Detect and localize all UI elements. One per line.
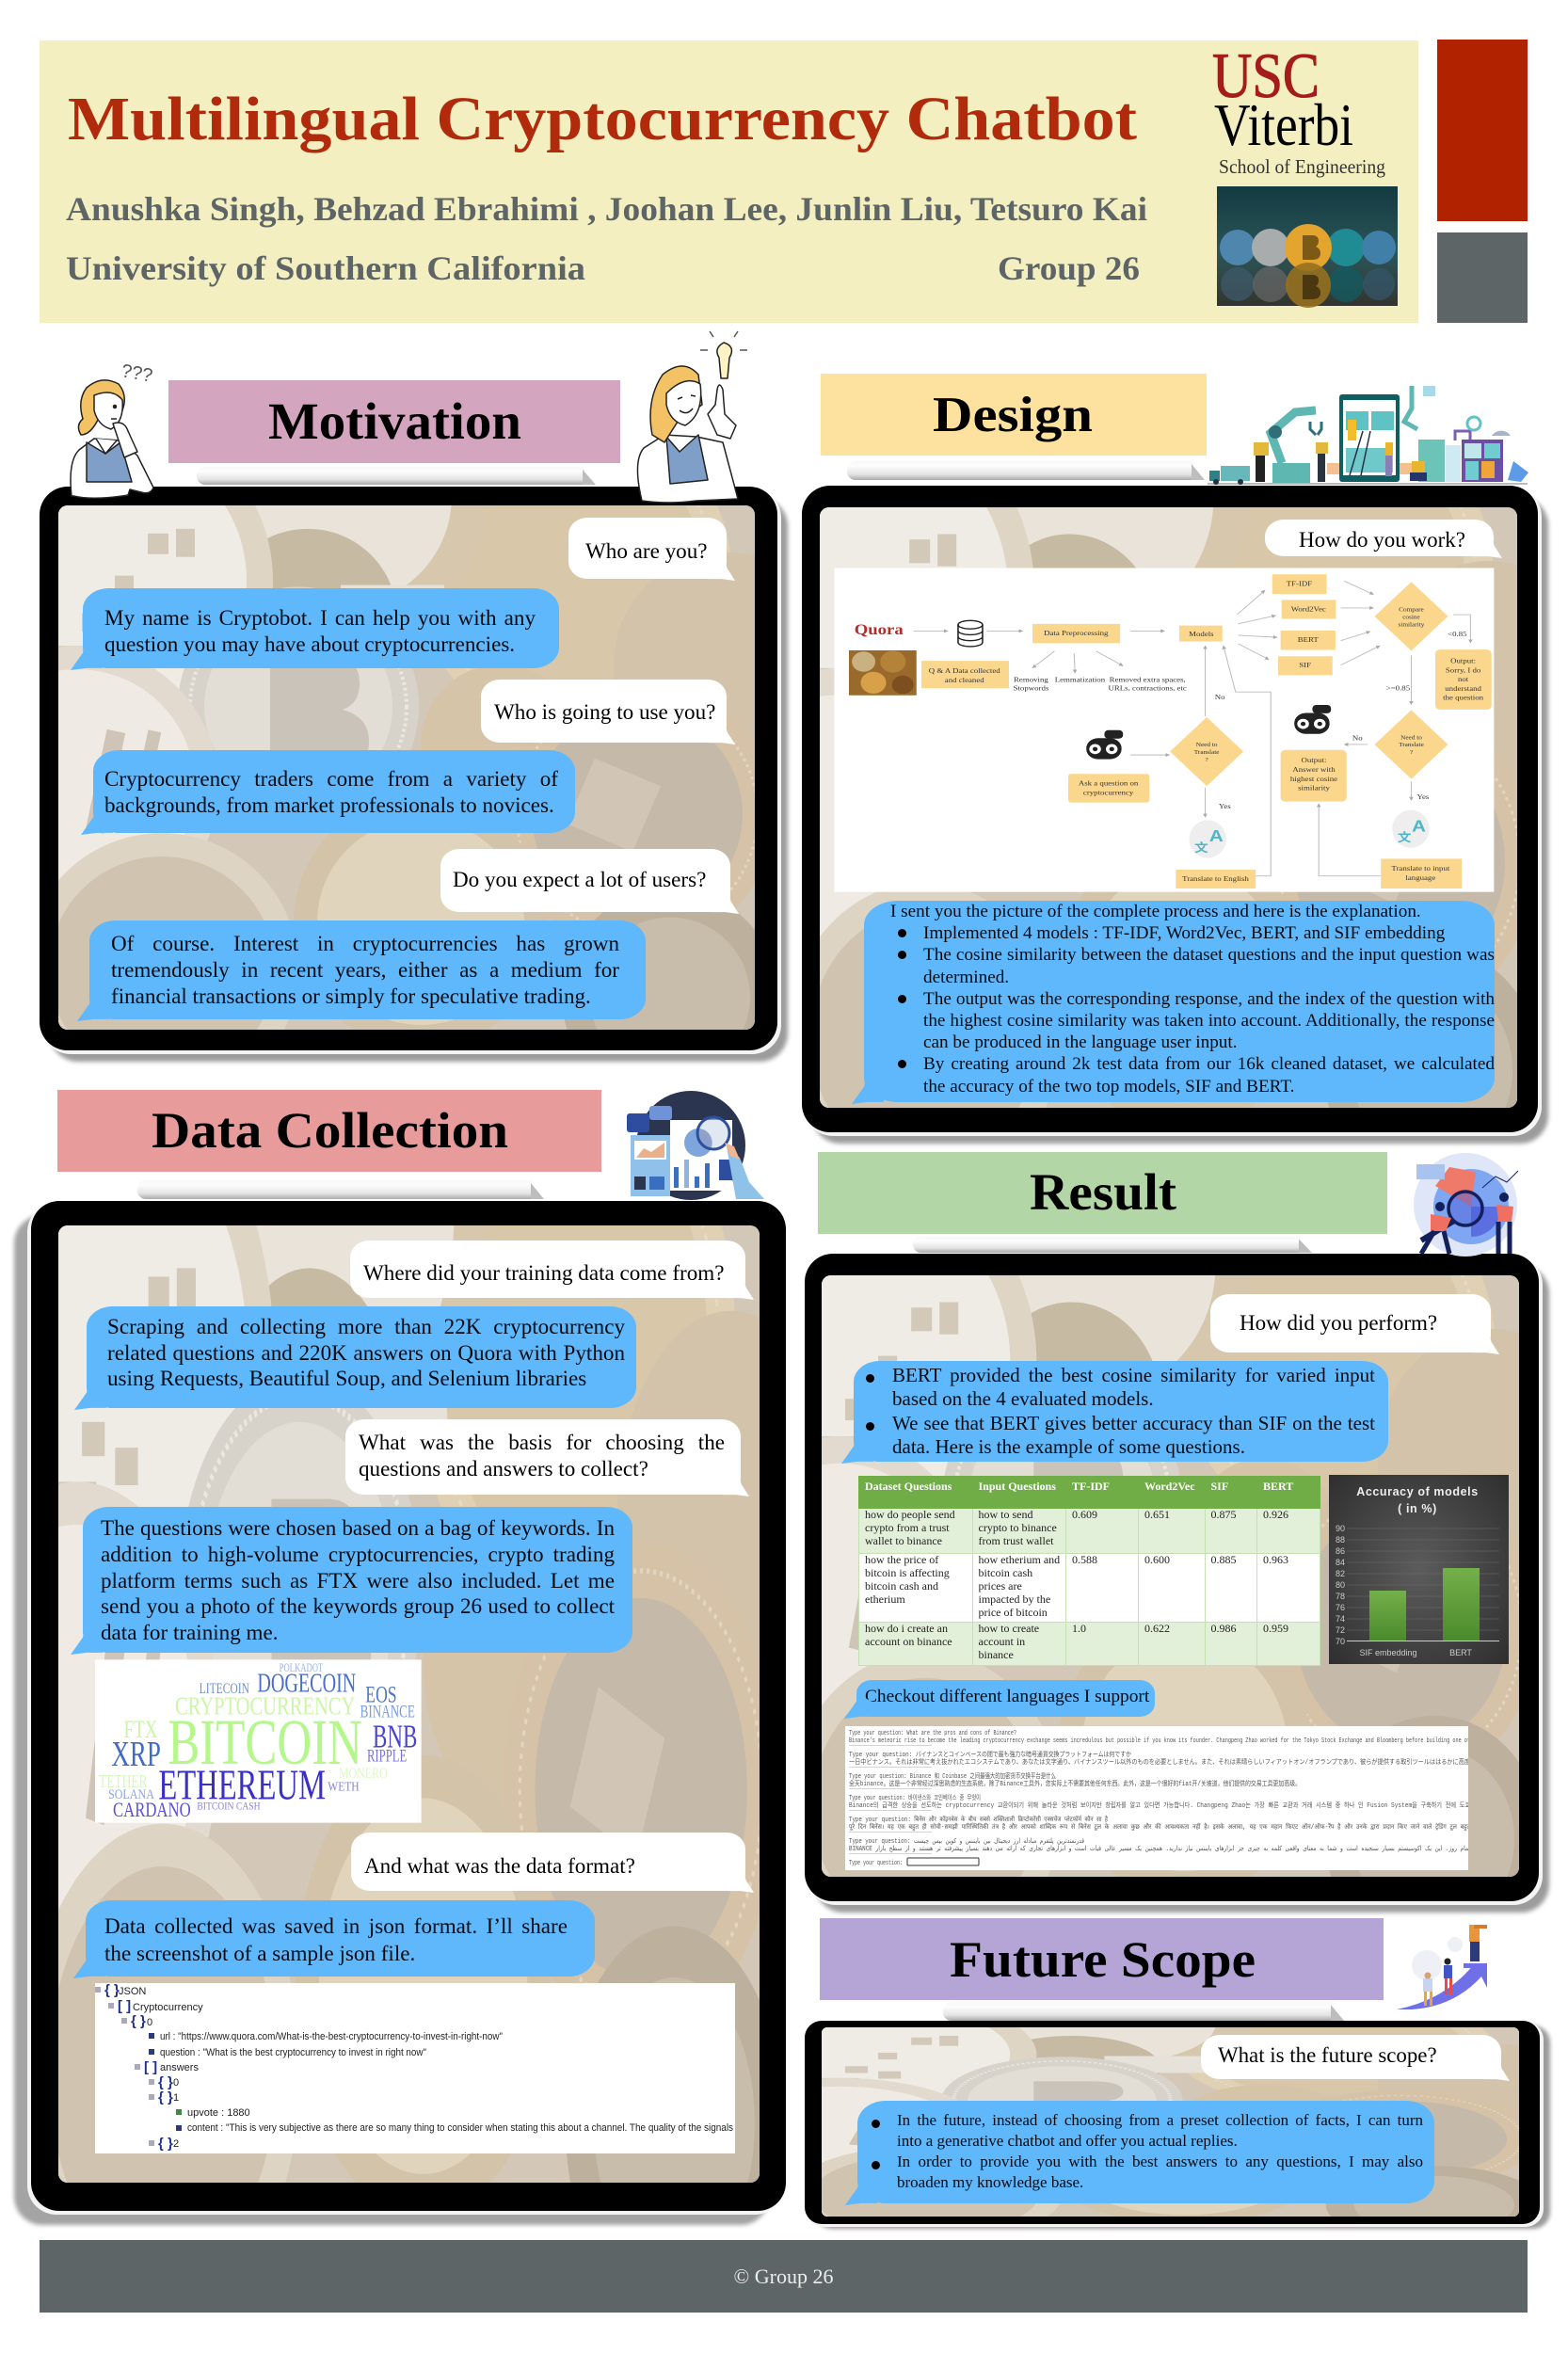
- user bubble: Who are you?: [585, 538, 708, 563]
- comparison table: how to send: [979, 1508, 1033, 1521]
- json screenshot: content : "This is very subjective as there are so many thing to consider when stating this about a channel. The quality of the signals is: [187, 2122, 743, 2134]
- bar chart: accuracy of models: 90: [1336, 1524, 1345, 1533]
- bar chart: accuracy of models: 88: [1336, 1535, 1345, 1545]
- flow labels: Removing: [1014, 676, 1048, 683]
- panel: design: [802, 374, 1551, 1146]
- json screenshot: answers: [160, 2062, 199, 2073]
- flow labels: Compare: [1399, 607, 1424, 613]
- multilingual terminal screenshot: पूरे दिन बिनेंस। यह एक बहुत ही सोची-समझी पारिस्थितिकी तंत्र है और आपको शाब्दिक रूप से बिनेंस टूल के अलावा कुछ और की आवश्यकता नहीं है। इसके अलावा, यह एक महान फिएट ऑन/ऑफ-रैंप है और उनके द्वारा प्रदान किए जाने वाले ट्रेडिंग टूल बहुत: [849, 1822, 1471, 1832]
- comparison table: 0.600: [1144, 1553, 1170, 1566]
- tablet frame: [805, 2021, 1540, 2224]
- bot bubble: [87, 1306, 636, 1408]
- flow labels: not: [1458, 676, 1469, 683]
- bot bubble: using Requests, Beautiful Soup, and Selenium libraries: [107, 1366, 586, 1390]
- comparison table: bitcoin is affecting: [865, 1566, 950, 1579]
- comparison table: impacted by the: [979, 1593, 1050, 1606]
- bot bubble: [83, 1507, 632, 1653]
- university: University of Southern California: [66, 249, 585, 287]
- multilingual terminal screenshot: Type your question:: [849, 1860, 903, 1867]
- comparison table: crypto to binance: [979, 1521, 1057, 1534]
- word cloud: RIPPLE: [367, 1747, 407, 1767]
- word cloud: SOLANA: [108, 1787, 154, 1802]
- bot bubble: [854, 1361, 1388, 1462]
- user bubble: [440, 849, 730, 912]
- bar chart: accuracy of models: 74: [1336, 1614, 1345, 1624]
- flow labels: ?: [1410, 750, 1413, 756]
- flow labels: URLs, contractions, etc: [1109, 684, 1187, 692]
- word cloud: DOGECOIN: [257, 1668, 357, 1698]
- flow labels: Translate to input: [1391, 864, 1450, 872]
- tablet frame: [31, 1201, 786, 2211]
- coin background screen: [822, 1275, 1519, 1877]
- icon: growth arrow: [1397, 1925, 1487, 2009]
- heading: result: Result: [1030, 1163, 1177, 1221]
- user bubble: [345, 1419, 741, 1495]
- comparison table: etherium: [865, 1593, 905, 1606]
- flow labels: BERT: [1298, 636, 1319, 644]
- word cloud: BITCOIN CASH: [197, 1799, 261, 1812]
- user bubble: How did you perform?: [1240, 1311, 1437, 1335]
- flow labels: SIF: [1299, 661, 1311, 669]
- flow labels: Need to: [1400, 735, 1423, 741]
- multilingual terminal screenshot: 一日中ビナンス。それは非常に考え抜かれたエコシステムであり、あなたは文字通り、バイナンスツール以外のものを必要としません。また、それは素晴らしいフィアットオン/オフランプであり、彼らが提供する取引ツールははるかに高度: [849, 1757, 1470, 1767]
- user bubble: [568, 518, 727, 579]
- json screenshot: [ ]: [144, 2059, 157, 2075]
- comparison table: how etherium and: [979, 1553, 1060, 1566]
- flow labels: Q & A Data collected: [929, 667, 1001, 675]
- bot bubble: In the future, instead of choosing from a preset collection of facts, I can turn: [897, 2111, 1423, 2129]
- bot bubble: financial transactions or simply for speculative trading.: [111, 984, 591, 1008]
- flow labels: [855, 580, 1483, 883]
- bot bubble: The questions were chosen based on a bag of keywords. In: [101, 1515, 615, 1540]
- flow labels: similarity: [1298, 784, 1331, 792]
- word cloud: MONERO: [339, 1766, 388, 1782]
- bot bubble: [86, 1900, 595, 1977]
- bar chart: accuracy of models: Accuracy of models: [1356, 1485, 1479, 1498]
- heading: motivation: Motivation: [268, 392, 521, 450]
- word cloud: BINANCE: [360, 1702, 415, 1721]
- flow labels: highest cosine: [1290, 775, 1337, 783]
- heading: motivation: [168, 380, 620, 463]
- flow labels: >=0.85: [1386, 684, 1410, 692]
- logo: USC Viterbi: Viterbi: [1214, 92, 1353, 158]
- comparison table: how the price of: [865, 1553, 938, 1566]
- bar chart: accuracy of models: 76: [1336, 1603, 1345, 1612]
- heading: data collection: [57, 1090, 601, 1172]
- flow connectors: [914, 581, 1470, 876]
- word cloud: BNB: [373, 1719, 417, 1755]
- bot bubble: can be produced in the language user input.: [923, 1032, 1238, 1052]
- flow labels: TF-IDF: [1287, 580, 1313, 588]
- translate icons: [1189, 810, 1430, 857]
- json screenshot: 1: [173, 2092, 179, 2104]
- flow labels: Translate to English: [1182, 875, 1249, 883]
- word cloud: ETHEREUM: [158, 1761, 326, 1808]
- bot bubble: related questions and 220K answers on Quora with Python: [107, 1340, 625, 1365]
- comparison table: prices are: [979, 1579, 1022, 1593]
- word cloud: XRP: [111, 1735, 161, 1774]
- bot bubble: [89, 920, 646, 1019]
- panel: motivation: [40, 331, 791, 1064]
- user bubble: [1201, 2035, 1501, 2079]
- stylus: [913, 1237, 1301, 1253]
- title banner: [40, 40, 1418, 323]
- comparison table: SIF: [1210, 1480, 1228, 1493]
- json screenshot: 2: [173, 2138, 179, 2150]
- json screenshot: JSON: [119, 1986, 146, 1997]
- bot bubble: data for training me.: [101, 1620, 279, 1644]
- bot bubble: [856, 1680, 1155, 1717]
- multilingual terminal screenshot: [845, 1726, 1471, 1870]
- multilingual terminal screenshot: Type your question: Binance 和 Coinbase 之间最强大的加密货币交换平台是什么: [849, 1771, 1056, 1781]
- user bubble: And what was the data format?: [364, 1853, 635, 1878]
- flow labels: ?: [1206, 757, 1208, 763]
- bot bubble: Scraping and collecting more than 22K cryptocurrency: [107, 1314, 625, 1338]
- comparison table: price of bitcoin: [979, 1606, 1048, 1619]
- comparison table: how do i create an: [865, 1622, 948, 1635]
- translate icons: 文: [1194, 838, 1208, 855]
- comparison table: 0.588: [1072, 1553, 1097, 1566]
- flow labels: cosine: [1402, 615, 1420, 620]
- json screenshot: [ ]: [118, 1998, 131, 2014]
- bot bubble: [864, 901, 1495, 1102]
- bot bubble: backgrounds, from market professionals to novices.: [104, 792, 554, 817]
- multilingual terminal screenshot: 全天binance。这是一个非常经过深思熟虑的生态系统，除了Binance工具外，您实际上不需要其他任何东西。此外，这是一个很好的fiat开/关坡道，他们提供的交易工具更加高级。: [849, 1779, 1301, 1788]
- bot bubble: addition to high-volume cryptocurrencies, crypto trading: [101, 1542, 615, 1566]
- word cloud: TETHER: [99, 1771, 148, 1792]
- multilingual terminal screenshot: BINANCE تمام روز. این یک اکوسیستم بسیار سنجیده است و شما به معنای واقعی کلمه به چیزی جز ابزارهای بایننس نیاز ندارید. همچنین یک مسیر عالی فیات است و ابزارهای تجاری که ارائه می دهند بسیار پیشرفته تر هستند و از سطح بازار: [849, 1845, 1470, 1853]
- comparison table: crypto from a trust: [865, 1521, 950, 1534]
- bot bubble: [857, 2101, 1434, 2203]
- comparison table: 0.622: [1144, 1622, 1170, 1635]
- word cloud: POLKADOT: [280, 1661, 323, 1674]
- flow labels: similarity: [1399, 622, 1425, 628]
- word cloud: EOS: [365, 1681, 397, 1707]
- comparison table: 0.885: [1210, 1553, 1237, 1566]
- bot bubble: Cryptocurrency traders come from a variety of: [104, 766, 558, 791]
- flow labels: Word2Vec: [1291, 605, 1326, 613]
- comparison table: BERT: [1263, 1480, 1293, 1493]
- flow labels: and cleaned: [945, 676, 985, 684]
- bot bubble: My name is Cryptobot. I can help you with any: [104, 605, 536, 630]
- bar chart: accuracy of models: [1329, 1475, 1509, 1664]
- word cloud: [95, 1659, 422, 1823]
- json screenshot: { }: [158, 2074, 173, 2090]
- flow labels: Yes: [1417, 793, 1429, 801]
- user bubble: [350, 1241, 745, 1298]
- flow labels: Output:: [1450, 657, 1476, 664]
- coin background screen: [58, 1225, 760, 2183]
- stylus: [943, 2002, 1333, 2021]
- tablet frame: [805, 1254, 1539, 1901]
- flow labels: Models: [1189, 631, 1214, 638]
- image: crypto coins: [1217, 186, 1398, 308]
- flowchart: [834, 568, 1494, 892]
- json screenshot: url : "https://www.quora.com/What-is-the-best-cryptocurrency-to-invest-in-right-now": [160, 2031, 503, 2042]
- bot bubble: the highest cosine similarity was taken into account. Additionally, the response: [923, 1011, 1495, 1031]
- word cloud: CRYPTOCURRENCY: [175, 1691, 355, 1721]
- json screenshot: { }: [131, 2013, 146, 2029]
- bar chart: accuracy of models: SIF embedding: [1359, 1648, 1417, 1657]
- flow labels: Translate: [1194, 750, 1219, 756]
- coin background screen: [822, 2027, 1519, 2217]
- multilingual terminal screenshot: Binance의 급격한 상승을 선도하는 cryptocurrency 교환이되기 위해 놀라운 것처럼 보이지만 창립자를 알고 있다면 가능합니다. Changpeng Zhao는 가장 빠른 교환과 거래 시스템 중 하나 인 Fusion System을 구축하기 전에 도쿄: [849, 1801, 1470, 1810]
- bot bubble: platform terms such as FTX were also included. Let me: [101, 1568, 615, 1593]
- comparison table: bitcoin cash and: [865, 1579, 938, 1593]
- bar chart: accuracy of models: 86: [1336, 1546, 1345, 1556]
- json screenshot: 0: [173, 2077, 179, 2089]
- bot bubble: [83, 588, 559, 668]
- icon: result analysis: [1414, 1153, 1518, 1257]
- comparison table: [858, 1476, 1320, 1666]
- icon: data analysis: [627, 1091, 764, 1200]
- bar chart: accuracy of models: 72: [1336, 1625, 1345, 1635]
- bot bubble: We see that BERT gives better accuracy than SIF on the test: [892, 1412, 1375, 1434]
- user bubble: How do you work?: [1299, 528, 1465, 552]
- comparison table: Input Questions: [979, 1480, 1056, 1493]
- logo: USC Viterbi: School of Engineering: [1219, 155, 1385, 178]
- comparison table: how do people send: [865, 1508, 955, 1521]
- flow labels: No: [1352, 734, 1363, 742]
- bar chart: accuracy of models: 78: [1336, 1592, 1345, 1601]
- coin background screen: [58, 505, 755, 1030]
- comparison table: Dataset Questions: [865, 1480, 952, 1493]
- comparison table: 0.926: [1263, 1508, 1288, 1521]
- multilingual terminal screenshot: Type your question: 바이낸스와 코인베이스 중 무엇이: [849, 1793, 981, 1802]
- json screenshot: [95, 1982, 743, 2153]
- bot bubble: data. Here is the example of some questions.: [892, 1435, 1245, 1458]
- multilingual terminal screenshot: Type your question: قدرتمندترین پلتفرم مبادله ارز دیجیتال بین بایننس و کوین بیس چیست: [849, 1837, 1084, 1846]
- user bubble: Do you expect a lot of users?: [453, 867, 706, 891]
- title: Multilingual Cryptocurrency Chatbot: [68, 85, 1137, 153]
- json screenshot: { }: [104, 1982, 120, 1998]
- comparison table: 0.986: [1210, 1622, 1237, 1635]
- bot bubble: question you may have about cryptocurrencies.: [104, 632, 515, 656]
- translate icons: A: [1209, 826, 1224, 846]
- group label: Group 26: [998, 249, 1140, 287]
- comparison table: TF-IDF: [1072, 1480, 1110, 1493]
- bot bubble: Checkout different languages I support: [865, 1687, 1149, 1706]
- heading: result: [818, 1152, 1387, 1234]
- coin photo: [849, 650, 917, 696]
- comparison table: account on binance: [865, 1635, 952, 1648]
- footer: © Group 26: [734, 2265, 833, 2288]
- heading: future scope: Future Scope: [950, 1931, 1256, 1988]
- json screenshot: 0: [147, 2017, 152, 2028]
- json screenshot: Cryptocurrency: [133, 2002, 203, 2013]
- json screenshot: upvote : 1880: [187, 2107, 250, 2119]
- word cloud: BITCOIN: [168, 1706, 362, 1778]
- flow labels: Quora: [855, 620, 904, 638]
- comparison table: how to create: [979, 1622, 1039, 1635]
- bot bubble: By creating around 2k test data from our 16k cleaned dataset, we calculated: [923, 1054, 1495, 1074]
- flow labels: Stopwords: [1014, 684, 1048, 692]
- multilingual terminal screenshot: Type your question: バイナンスとコインベースの間で最も強力な暗号通貨交換プラットフォームは何ですか: [849, 1750, 1131, 1759]
- word cloud: WETH: [328, 1781, 360, 1795]
- stylus: [137, 1180, 533, 1199]
- flow labels: Ask a question on: [1079, 779, 1138, 787]
- flow labels: Removed extra spaces,: [1110, 676, 1186, 683]
- user bubble: [1210, 1294, 1491, 1353]
- bot bubble: [93, 750, 575, 833]
- flow labels: cryptocurrency: [1083, 789, 1134, 796]
- flow labels: Data Preprocessing: [1044, 629, 1108, 637]
- user bubble: Who is going to use you?: [494, 699, 715, 724]
- panel: result: [805, 1152, 1552, 1915]
- json screenshot: question : "What is the best cryptocurrency to invest in right now": [160, 2047, 426, 2058]
- user bubble: Where did your training data come from?: [363, 1260, 724, 1285]
- bot bubble: into a generative chatbot and offer you actual replies.: [897, 2132, 1238, 2150]
- icon: thinking girl: ???: [120, 360, 154, 387]
- bot bubble: based on the 4 evaluated models.: [892, 1387, 1154, 1410]
- bot bubble: determined.: [923, 968, 1009, 987]
- bar chart: accuracy of models: 84: [1336, 1558, 1345, 1567]
- comparison table: 0.651: [1144, 1508, 1170, 1521]
- bar chart: accuracy of models: 82: [1336, 1569, 1345, 1578]
- comparison table: wallet to binance: [865, 1534, 942, 1547]
- logo: USC Viterbi: [1212, 40, 1385, 178]
- user bubble: [351, 1833, 745, 1891]
- translate icons: 文: [1398, 827, 1412, 845]
- heading: design: Design: [933, 388, 1093, 442]
- icon: thinking girl: [71, 360, 154, 498]
- word cloud: CARDANO: [113, 1799, 191, 1821]
- accent block: red: [1437, 40, 1528, 221]
- accent block: grey: [1437, 232, 1528, 323]
- translate icons: A: [1412, 817, 1426, 836]
- bot bubble: I sent you the picture of the complete process and here is the explanation.: [890, 902, 1421, 921]
- panel: data collection: [11, 1090, 786, 2228]
- bot bubble: the accuracy of the two top models, SIF and BERT.: [923, 1077, 1294, 1096]
- user bubble: What was the basis for choosing the: [359, 1430, 725, 1454]
- bot bubble: Data collected was saved in json format. I’ll share: [104, 1913, 568, 1938]
- comparison table: bitcoin cash: [979, 1566, 1032, 1579]
- comparison table: 0.963: [1263, 1553, 1288, 1566]
- flow labels: Yes: [1219, 802, 1231, 810]
- bar chart: accuracy of models: BERT: [1449, 1648, 1472, 1657]
- multilingual terminal screenshot: Type your question: बिनेंस और कॉइनबेस के बीच सबसे शक्तिशाली क्रिप्टोकरेंसी एक्सचेंज प्लेटफॉर्म कौन सा है: [849, 1815, 1108, 1824]
- multilingual terminal screenshot: Type your question: What are the pros and cons of Binance?: [849, 1730, 1016, 1737]
- flow labels: Translate: [1399, 743, 1424, 748]
- bar chart: accuracy of models: 80: [1336, 1580, 1345, 1590]
- tablet frame: [40, 487, 777, 1050]
- json screenshot: { }: [158, 2136, 173, 2152]
- bar chart: accuracy of models: ( in %): [1398, 1502, 1437, 1515]
- comparison table: 0.959: [1263, 1622, 1288, 1635]
- icon: idea girl with bulb: [637, 331, 747, 503]
- bot bubble: The output was the corresponding response, and the index of the question with: [923, 989, 1495, 1009]
- comparison table: binance: [979, 1648, 1014, 1661]
- flow labels: Output:: [1302, 757, 1326, 764]
- json screenshot: { }: [158, 2089, 173, 2105]
- comparison table: Word2Vec: [1144, 1480, 1195, 1493]
- tablet frame: [802, 486, 1538, 1132]
- heading: data collection: Data Collection: [152, 1102, 508, 1159]
- user bubble: questions and answers to collect?: [359, 1456, 648, 1481]
- flow labels: <0.85: [1448, 630, 1467, 638]
- user bubble: [1265, 520, 1494, 556]
- bot bubble: the screenshot of a sample json file.: [104, 1941, 415, 1965]
- flow labels: No: [1215, 694, 1225, 701]
- stylus: [847, 461, 1193, 480]
- footer: [40, 2240, 1528, 2313]
- flow labels: Lemmatization: [1055, 676, 1105, 683]
- flow labels: Need to: [1196, 743, 1218, 748]
- bot bubble: In order to provide you with the best answers to any questions, I may also: [897, 2153, 1423, 2170]
- heading: future scope: [820, 1918, 1384, 2000]
- panel: future scope: [805, 1918, 1553, 2232]
- bot bubble: Of course. Interest in cryptocurrencies has grown: [111, 931, 619, 955]
- flow boxes: [921, 574, 1492, 888]
- flow labels: the question: [1443, 694, 1483, 701]
- logo: USC Viterbi: USC: [1212, 40, 1320, 111]
- stylus: [197, 467, 584, 485]
- bot bubble: Implemented 4 models : TF-IDF, Word2Vec, BERT, and SIF embedding: [923, 923, 1445, 943]
- flow labels: language: [1405, 874, 1436, 882]
- comparison table: 0.875: [1210, 1508, 1237, 1521]
- user bubble: [481, 680, 727, 743]
- comparison table: from trust wallet: [979, 1534, 1053, 1547]
- bot bubble: The cosine similarity between the dataset questions and the input question was: [923, 945, 1495, 965]
- comparison table: 1.0: [1072, 1622, 1086, 1635]
- flow labels: Answer with: [1292, 766, 1336, 774]
- database icon: [958, 620, 983, 647]
- bot bubble: send you a photo of the keywords group 26 used to collect: [101, 1593, 615, 1618]
- bot bubble: tremendously in recent years, either as a medium for: [111, 957, 619, 982]
- word cloud: LITECOIN: [200, 1681, 249, 1697]
- authors: Anushka Singh, Behzad Ebrahimi , Joohan Lee, Junlin Liu, Tetsuro Kai: [66, 190, 1147, 228]
- heading: design: [821, 374, 1207, 456]
- word cloud: FTX: [124, 1715, 157, 1743]
- coin background screen: [820, 507, 1517, 1108]
- bar chart: accuracy of models: 70: [1336, 1637, 1345, 1646]
- bot bubble: broaden my knowledge base.: [897, 2173, 1083, 2191]
- comparison table: 0.609: [1072, 1508, 1097, 1521]
- flow labels: understand: [1445, 684, 1482, 693]
- user bubble: What is the future scope?: [1218, 2043, 1437, 2067]
- robot icons: [1086, 705, 1331, 760]
- bot bubble: BERT provided the best cosine similarity for varied input: [892, 1363, 1375, 1385]
- flow labels: Sorry, I do: [1446, 666, 1480, 674]
- comparison table: account in: [979, 1635, 1025, 1648]
- icon: factory illustration: [1208, 386, 1528, 485]
